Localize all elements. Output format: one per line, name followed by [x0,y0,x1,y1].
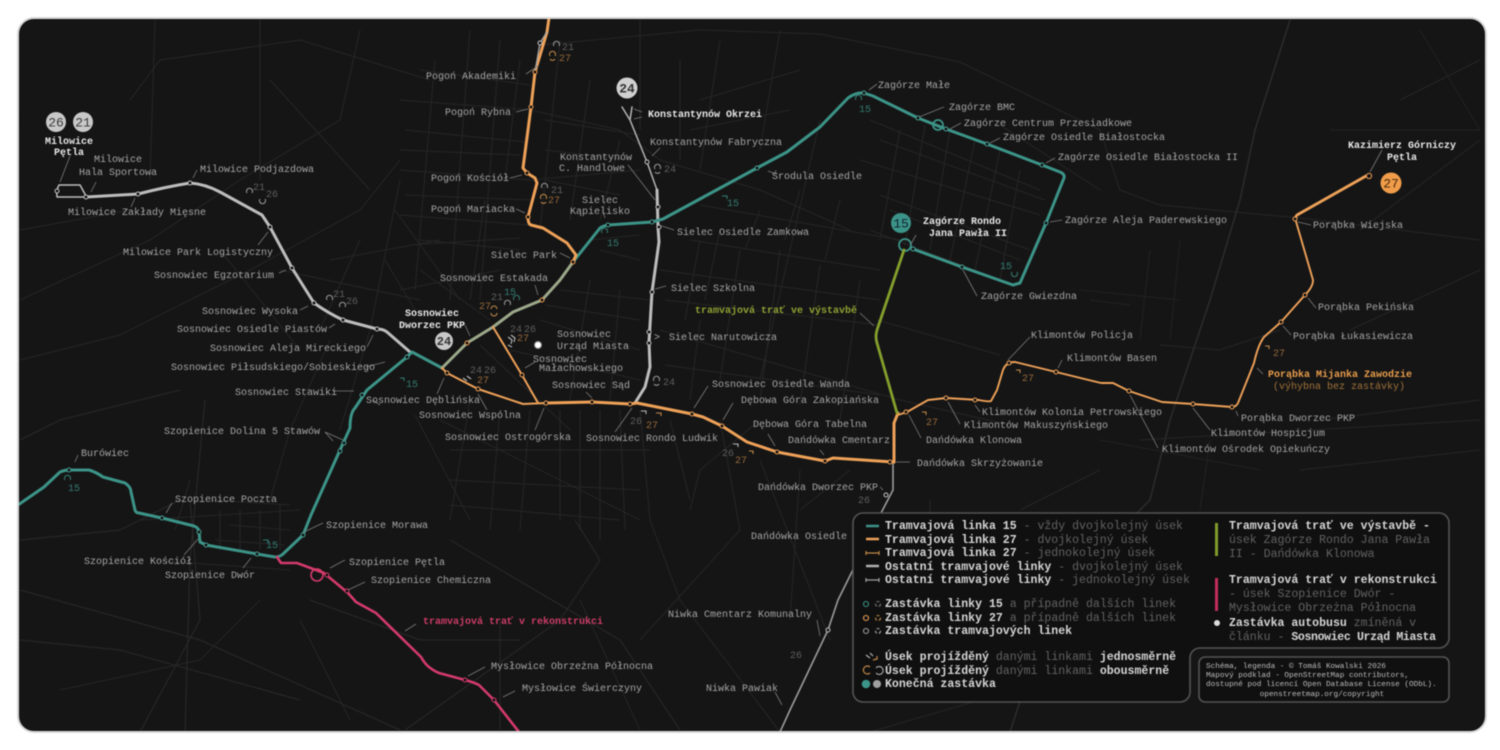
credits: text: Schéma, legenda - © Tomáš Kowalski 2026 [1206,662,1386,671]
icon: line badge 24 north: 24 [619,82,635,96]
labels: Zagórze: Zagórze Osiedle Białostocka [1003,132,1165,144]
labels: lines 21/26 west: Sosnowiec Stawiki [235,387,337,399]
markers: line numbers: 26 [630,417,642,428]
legend: line entries: Ostatní tramvajové linky - dvojkolejný úsek [885,561,1183,574]
line: pink terminal loop [311,569,323,581]
labels: Mysłowice and Niwka: Niwka Cmentarz Komunalny [668,609,812,621]
labels: Pogoń and Sielec: Kąpielisko [570,206,630,218]
line: 27 north [523,18,576,262]
labels: Klimontów: Klimontów Makuszyńskiego [964,420,1108,432]
labels: Porąbka and Kazimierz: Kazimierz Górniczy [1348,140,1456,152]
labels: lines 21/26 west [45,136,375,399]
labels: Zagórze: Jana Pawła II [929,228,1007,240]
markers: line numbers: 15 [504,288,516,299]
callout: line under construction: tramvajová trať ve výstavbě [695,305,857,317]
legend: construction entry: II - Dańdówka Klonowa [1229,548,1375,561]
labels: Sosnowiec centre [366,308,718,445]
labels: Szopienice and Burówiec: Burówiec [81,448,129,460]
labels: Porąbka and Kazimierz: Porąbka Wiejska [1313,220,1403,232]
labels: lines 21/26 west: Hala Sportowa [79,167,157,179]
line: 27 Dańdówka junction [894,413,898,462]
labels: Sosnowiec centre: Sosnowiec Sąd [552,380,630,392]
labels: lines 21/26 west: Milowice Podjazdowa [200,164,314,176]
labels: Klimontów [964,330,1330,456]
markers: line numbers: 27 [1273,349,1285,360]
labels: lines 21/26 west: Sosnowiec Egzotarium [154,270,274,282]
icon: line badge 24 Dworzec: 24 [437,335,451,349]
line: other lines south of Dańdówka [780,462,893,732]
labels: Szopienice and Burówiec: Szopienice Dolina 5 Stawów [164,426,320,438]
labels: lines 21/26 west: Milowice Zakłady Mięsne [68,207,206,219]
line: other line 24 north, single track [622,107,657,190]
labels: Szopienice and Burówiec: Szopienice Poczta [175,494,277,506]
stops: teal [67,91,1048,556]
labels: Sosnowiec centre: Urząd Miasta [557,341,629,353]
legend: direction entries: Konečná zastávka [885,678,996,691]
labels: lines 21/26 west: Sosnowiec Osiedle Piastów [177,324,327,336]
icon: line badge 24 north [616,78,638,98]
labels: Sosnowiec centre: Małachowskiego [539,363,623,375]
icon: line badge 21: 21 [75,116,91,130]
legend: reconstruction entry [1229,574,1437,615]
labels: Konstantynów [559,109,862,183]
labels: Mysłowice and Niwka: Mysłowice Świerczyny [522,681,642,695]
labels: Zagórze: Zagórze Rondo [923,216,1001,228]
legend: reconstruction entry: Tramvajová trať v rekonstrukci [1229,574,1437,587]
legend: line swatches [866,526,879,582]
legend: direction entries: Úsek projížděný danými linkami obousměrně [885,664,1169,678]
markers: line numbers: 15 [859,105,871,116]
icon: line badge 15: 15 [893,216,909,232]
labels: lines 21/26 west: Sosnowiec Aleja Mireckiego [210,343,366,355]
labels: Dębowa Góra and Dańdówka: Dębowa Góra Zakopiańska [741,395,879,407]
line: other line 24 south, double track [635,190,659,403]
labels: Konstantynów: Konstantynów Fabryczna [650,137,782,149]
stops: pink [325,573,496,702]
labels: Zagórze [878,80,1238,303]
labels: Porąbka and Kazimierz: Pętla [1387,152,1417,164]
icon: line badge 27 [1380,172,1402,194]
markers: line numbers: 15 [1000,262,1012,273]
labels: Porąbka and Kazimierz: Porąbka Dworzec PKP [1241,413,1355,425]
labels: Szopienice and Burówiec: Szopienice Pętla [349,557,445,569]
legend: reconstruction bar [1215,578,1218,611]
markers: line numbers: 21 [333,290,345,301]
icon: line badge 26: 26 [48,116,64,130]
labels: Pogoń and Sielec: Sielec [582,195,618,207]
legend: bus stop entry: článku - Sosnowiec Urząd Miasta [1229,631,1436,644]
labels: Pogoń and Sielec: Pogoń Kościół [431,173,509,185]
markers: line numbers: 15 [406,380,418,391]
markers: line numbers: 27 [926,418,938,429]
labels: Szopienice and Burówiec: Szopienice Chemiczna [371,575,491,587]
markers: line numbers: 21 [253,183,265,194]
credits: box [1199,657,1449,702]
stops: orange [445,70,1372,464]
labels: lines 21/26 west: Milowice [94,154,142,166]
credits: text [1206,662,1437,699]
labels: Porąbka and Kazimierz: Porąbka Pekińska [1318,302,1414,314]
labels: Sosnowiec centre: Sosnowiec Dęblińska [366,395,480,407]
labels: Pogoń and Sielec: Sielec Osiedle Zamkowa [677,227,809,239]
legend: stop entries [885,598,1176,638]
icon: line badge 21 [73,112,93,132]
stops: grey [55,41,888,632]
markers: line numbers: 15 [607,239,619,250]
labels: Klimontów: Klimontów Policja [1031,330,1133,342]
line: shared 15 + 27 section [442,262,573,368]
labels: Porąbka and Kazimierz: (výhybna bez zastávky) [1273,381,1405,393]
legend: bus stop entry [1229,617,1436,644]
legend: reconstruction entry: - úsek Szopienice Dwór - [1229,588,1395,601]
labels: lines 21/26 west: Sosnowiec Piłsudskiego/Sobieskiego [171,362,375,374]
legend: direction entries [885,650,1176,691]
legend: line entries: Ostatní tramvajové linky - jednokolejný úsek [885,574,1190,587]
markers: line numbers: 26 [790,651,802,662]
labels: Sosnowiec centre: Dworzec PKP [399,321,465,332]
credits: text: dostupné pod licencí Open Database License (ODbL). [1206,681,1437,689]
line: 15 teal west [18,352,442,557]
legend: bus stop symbol [1214,620,1220,626]
markers: line numbers: 27 [548,196,560,207]
legend: line entries: Tramvajová linka 15 - vždy dvojkolejný úsek [885,520,1183,533]
labels: Pogoń and Sielec: Pogoń Mariacka [431,204,515,216]
legend: stop entries: Zastávka tramvajových linek [885,625,1072,638]
labels: lines 21/26 west: Sosnowiec Wysoka [202,306,298,318]
line: under reconstruction pink [277,557,519,732]
line: 15 teal east loop [573,93,1064,285]
legend: reconstruction entry: Mysłowice Obrzeżna Północna [1229,602,1416,615]
line: 27 east, single track [898,218,1313,415]
icon: line badge 15 [891,213,911,233]
markers: line numbers: 21 [562,43,574,54]
legend: construction entry: Tramvajová trať ve výstavbě - [1229,520,1430,533]
labels: lines 21/26 west: Pętla [54,147,84,159]
labels: Sosnowiec centre: Sosnowiec Wspólna [419,410,521,422]
labels: Porąbka and Kazimierz: Porąbka Łukasiewicza [1293,331,1413,343]
labels: Dębowa Góra and Dańdówka: Dańdówka Dworzec PKP [758,482,878,494]
legend: construction entry: úsek Zagórze Rondo Jana Pawła [1229,534,1430,547]
labels: Mysłowice and Niwka [491,609,812,695]
markers: line numbers [68,43,1285,662]
markers: line numbers: 24 [663,378,675,389]
line: 27 to Kazimierz, double track [1295,176,1366,218]
line: other lines 21/26 west (Milowice) [86,183,410,352]
station labels [45,71,1456,695]
markers: line numbers: 26 [524,325,536,336]
line: 27 centre, double track [547,402,894,462]
labels: Szopienice and Burówiec: Szopienice Morawa [326,520,428,532]
labels: Dębowa Góra and Dańdówka: Dańdówka Skrzyżowanie [917,458,1043,470]
legend: direction entries: Úsek projížděný danými linkami jednosměrně [885,650,1176,664]
legend: direction symbols [863,653,883,674]
labels: Dębowa Góra and Dańdówka: Dańdówka Osiedle [751,531,847,543]
legend: line entries: Tramvajová linka 27 - dvojkolejný úsek [885,534,1148,547]
labels: Porąbka and Kazimierz: Porąbka Mijanka Zawodzie [1268,369,1412,381]
markers: line numbers: 26 [858,496,870,507]
labels: Klimontów: Klimontów Kolonia Petrowskiego [982,407,1162,419]
labels: Pogoń and Sielec: Pogoń Akademiki [426,71,516,83]
panel: legend [853,513,1449,702]
direction markers [64,41,1285,662]
markers: line numbers: 21 [491,293,503,304]
markers: line numbers: 24 [470,366,482,377]
markers: line numbers: 26 [346,297,358,308]
markers: line numbers: 27 [479,302,491,313]
legend: construction entry [1229,520,1430,561]
labels: Zagórze: Zagórze Osiedle Białostocka II [1058,152,1238,164]
line: terminal loop circles teal [899,120,943,251]
labels: Zagórze: Zagórze BMC [949,102,1015,114]
markers: line numbers: 27 [559,54,571,65]
markers: line numbers: 26 [266,190,278,201]
labels: Dębowa Góra and Dańdówka: Dębowa Góra Tabelna [753,419,867,431]
markers: line numbers: 26 [484,366,496,377]
labels: Dębowa Góra and Dańdówka: Dańdówka Klonowa [926,435,1022,447]
markers: line numbers: 15 [266,541,278,552]
line: Milowice terminal loop [57,185,86,197]
labels: Pogoń and Sielec: Sielec Park [491,250,557,262]
leader lines [60,66,1382,705]
labels: Mysłowice and Niwka: Mysłowice Obrzeżna Północna [491,661,653,673]
labels: Zagórze: Zagórze Centrum Przesiadkowe [964,118,1132,130]
legend: line entries [885,520,1190,587]
legend: bus stop entry: Zastávka autobusu zmíněná v [1229,617,1416,630]
labels: Konstantynów: Konstantynów Okrzei [648,109,762,121]
markers: line numbers: 27 [477,376,489,387]
labels: Pogoń and Sielec: Sosnowiec Estakada [440,273,548,285]
credits: text: openstreetmap.org/copyright [1260,691,1384,699]
markers: line numbers: 21 [551,186,563,197]
icon: line badge 27: 27 [1383,176,1399,192]
line: 27 triangle branch [493,327,538,403]
labels: Dębowa Góra and Dańdówka [712,379,1043,543]
labels: Pogoń and Sielec: Sielec Narutowicza [669,332,777,344]
labels: Pogoń and Sielec: Sielec Szkolna [671,283,755,295]
labels: Pogoń and Sielec: > [654,333,660,344]
callout: line under reconstruction: tramvajová trať v rekonstrukci [423,616,603,628]
markers: line numbers: 15 [68,484,80,495]
labels: Konstantynów: Konstantynów [560,152,632,164]
labels: Klimontów: Klimontów Hospicjum [1211,428,1325,440]
panel: credits [1199,657,1449,702]
labels: Sosnowiec centre: Sosnowiec [405,308,459,320]
legend: box outline [853,513,1449,702]
credits: text: Mapový podklad - OpenStreetMap contributors, [1206,672,1409,680]
labels: Mysłowice and Niwka: Niwka Pawiak [706,683,778,695]
labels: Pogoń and Sielec [426,71,809,344]
labels: Zagórze: Zagórze Małe [878,80,950,92]
legend: stop entries: Zastávka linky 15 a případně dalších linek [885,598,1176,611]
labels: Konstantynów: C. Handlowe [559,163,625,175]
labels: Szopienice and Burówiec [81,426,491,587]
markers: line numbers: 15 [727,199,739,210]
stops [55,41,1372,702]
labels: Zagórze: Zagórze Gwiezdna [981,291,1077,303]
labels: Sosnowiec centre: Sosnowiec Ostrogórska [445,432,571,444]
labels: Dębowa Góra and Dańdówka: Sosnowiec Osiedle Wanda [712,379,850,391]
legend: line entries: Tramvajová linka 27 - jednokolejný úsek [885,547,1155,560]
labels: Sosnowiec centre: Sosnowiec [533,354,587,366]
legend: construction bar [1215,523,1218,556]
labels: Dębowa Góra and Dańdówka: Dańdówka Cmentarz [788,435,890,447]
markers: line numbers: 24 [664,165,676,176]
labels: lines 21/26 west: Milowice [45,136,93,148]
legend: stop symbols [864,602,880,634]
labels: Szopienice and Burówiec: Szopienice Dwór [165,570,255,582]
line: under construction green [876,250,904,413]
markers: line numbers: 27 [646,421,658,432]
icon: bus stop Urząd Miasta [534,342,542,348]
markers: line numbers: 24 [510,325,522,336]
labels: Sosnowiec centre: Sosnowiec [557,329,611,341]
labels: Szopienice and Burówiec: Szopienice Kościół [84,556,192,568]
line: grey branch at top [535,32,547,72]
markers: line numbers: 27 [1022,374,1034,385]
icon: line badge 24 Dworzec [435,332,453,350]
labels: lines 21/26 west: Milowice Park Logistyczny [123,247,273,259]
labels: Klimontów: Klimontów Ośrodek Opiekuńczy [1162,444,1330,456]
markers: line numbers: 27 [517,334,529,345]
line: 27 one-way loop west [442,368,547,404]
labels: Porąbka and Kazimierz [1241,140,1456,425]
labels: Sosnowiec centre: Sosnowiec Rondo Ludwik [586,433,718,445]
labels: Konstantynów: Środula Osiedle [772,169,862,183]
labels: Klimontów: Klimontów Basen [1067,353,1157,365]
markers: direction arrows [64,41,1269,543]
labels: Zagórze: Zagórze Aleja Paderewskiego [1065,215,1227,227]
legend: final stop symbols [862,680,881,688]
labels: Pogoń and Sielec: Pogoń Rybna [445,107,511,119]
markers: line numbers: 27 [735,456,747,467]
legend: stop entries: Zastávka linky 27 a případně dalších linek [885,612,1176,625]
markers: line numbers: 26 [722,449,734,460]
icon: line badge 26 [46,112,66,132]
